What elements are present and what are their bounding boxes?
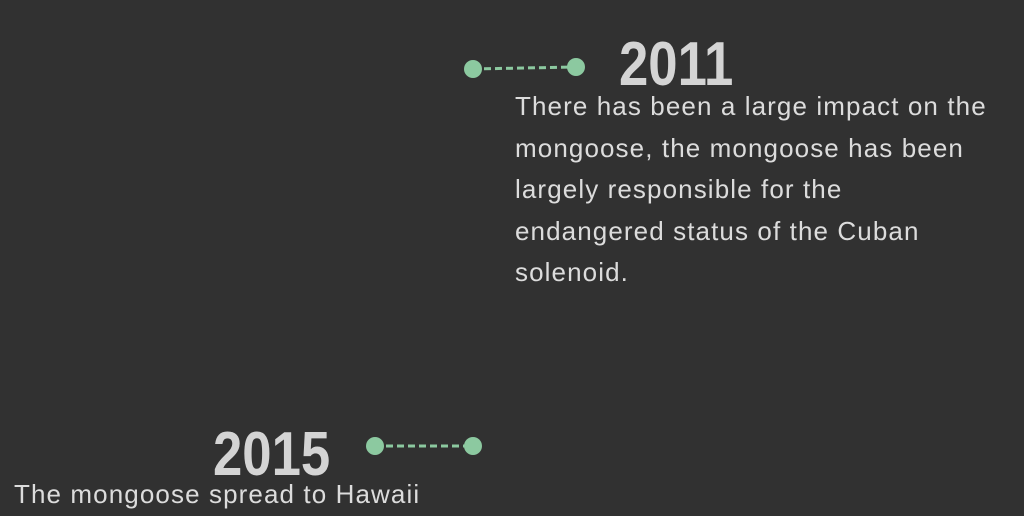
text: 2011 event: There has been a large impact on the <box>515 91 987 121</box>
year: 2011: 2011 <box>619 30 733 99</box>
text: 2011 event: mongoose, the mongoose has been <box>515 132 964 162</box>
text: 2011 event <box>515 91 987 287</box>
text: 2011 event: largely responsible for the <box>515 174 842 204</box>
text: 2011 event: solenoid. <box>515 257 629 287</box>
year: 2015: 2015 <box>213 420 330 489</box>
text: 2011 event: endangered status of the Cuban <box>515 216 920 246</box>
text: 2015 event: The mongoose spread to Hawaii <box>14 479 420 509</box>
